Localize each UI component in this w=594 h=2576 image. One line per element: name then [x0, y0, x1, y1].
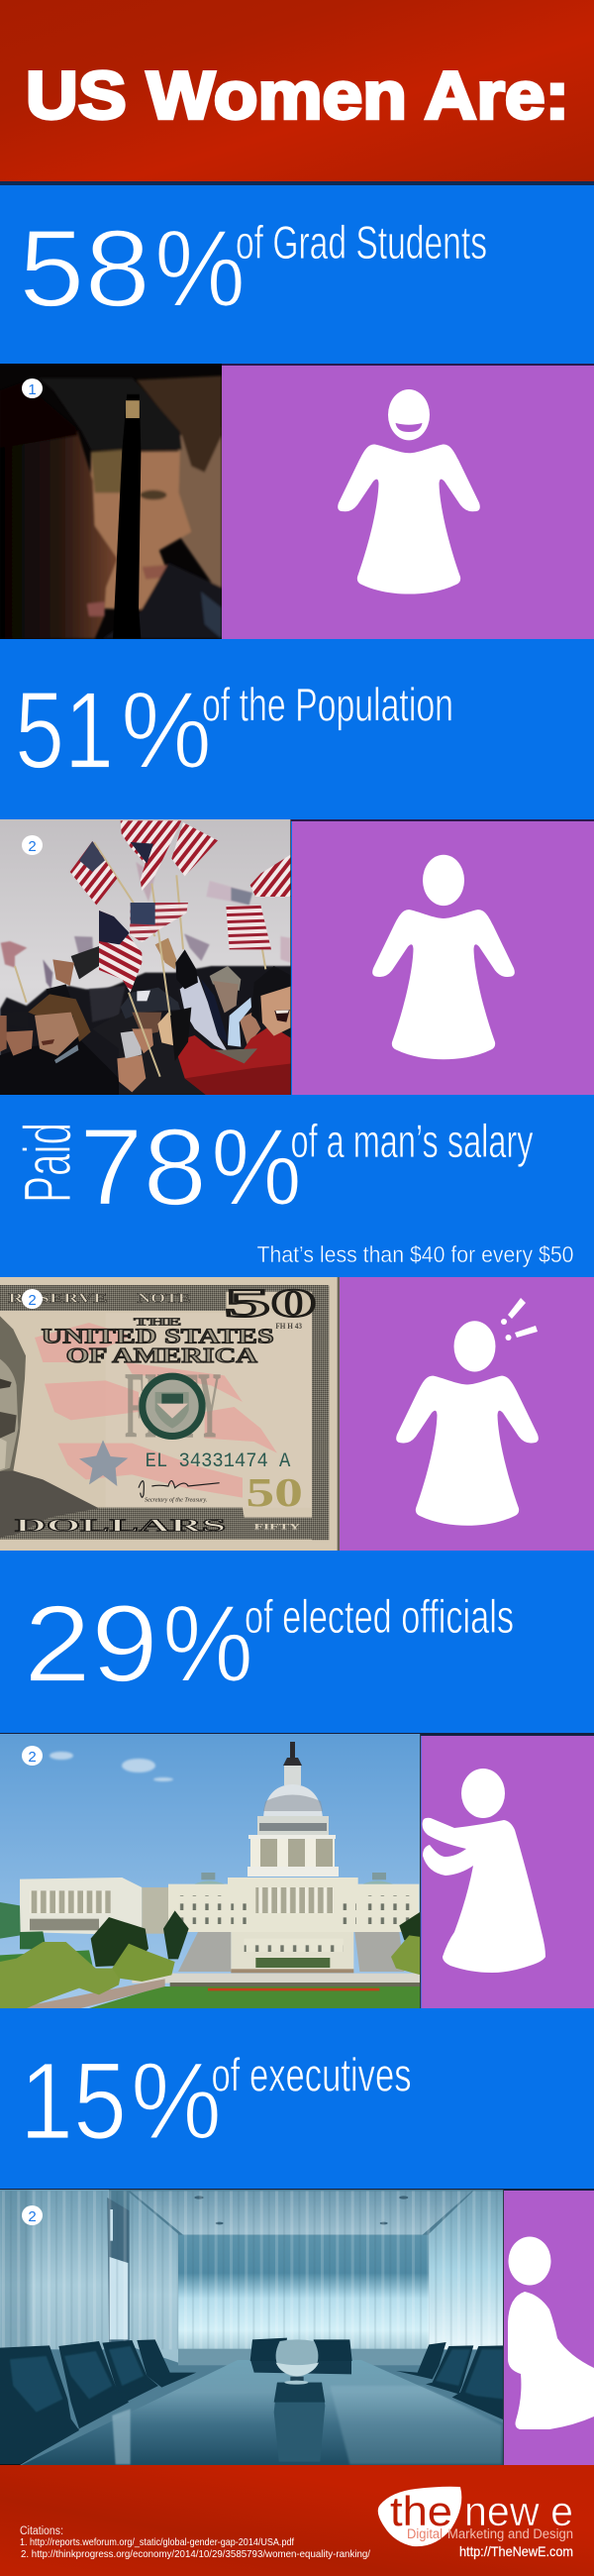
clouds	[50, 1752, 173, 1781]
stat: 51% of the population: %	[121, 670, 212, 792]
left wing	[20, 1878, 142, 1935]
right man	[251, 966, 276, 1020]
vase reflection	[274, 2383, 325, 2462]
center man with cap	[115, 1015, 119, 1017]
bill lettering: RESERVE	[8, 1290, 107, 1305]
signature	[139, 1481, 220, 1497]
logo: new e	[464, 2488, 573, 2534]
citation badge: 2	[28, 1292, 37, 1309]
chairs	[0, 2338, 505, 2464]
citation badge: 2	[28, 838, 37, 855]
crowd mass	[0, 966, 292, 1097]
bill lettering: 50	[246, 1470, 303, 1516]
stat: paid 78% of a man's salary	[10, 1107, 574, 1267]
table	[18, 2360, 505, 2467]
stat: 29% of elected officials	[24, 1583, 514, 1705]
man behind	[176, 434, 222, 590]
curtain folds	[0, 2191, 505, 2349]
logo: http://TheNewE.com	[459, 2543, 573, 2559]
citations: 1. http://reports.weforum.org/_static/global-gender-gap-2014/USA.pdf	[20, 2536, 294, 2548]
steps	[178, 1932, 231, 1972]
row 1 shadow line	[0, 364, 594, 366]
red jacket	[178, 1028, 291, 1095]
gloved hands	[157, 1013, 174, 1046]
second woman	[91, 451, 191, 610]
stat: 15% of executives: of executives	[212, 2049, 412, 2100]
gown	[102, 563, 222, 639]
seal	[143, 1376, 202, 1436]
citation badge	[22, 2205, 43, 2225]
stat: 51% of the population: 51	[15, 670, 114, 792]
citation badge	[22, 1289, 43, 1309]
icon: woman hit with ceiling marks	[396, 1321, 539, 1526]
stat: 29% of elected officials: %	[162, 1583, 253, 1705]
front woman	[0, 431, 118, 639]
icon: smiling woman	[338, 389, 480, 594]
right curtain	[429, 2191, 505, 2349]
logo: Marketing and Design	[447, 2526, 573, 2541]
pink swooshes	[35, 1323, 277, 1498]
logo: the	[390, 2488, 452, 2534]
citation badge: 2	[28, 2208, 37, 2225]
header banner	[0, 0, 594, 185]
citation badge	[22, 835, 43, 855]
star	[79, 1440, 128, 1486]
tassel	[113, 394, 141, 639]
stat: 58% of grad students: %	[154, 208, 246, 330]
citations	[20, 2525, 370, 2560]
cap	[38, 377, 182, 450]
central wing	[168, 1878, 419, 1932]
bill lettering: UNITED STATES	[42, 1325, 274, 1348]
note: That’s less than $40 for every $50	[257, 1241, 574, 1267]
inner left curtain	[130, 2193, 178, 2363]
stat: paid 78% of a man's salary: %	[211, 1107, 302, 1229]
ceiling lights	[194, 2196, 408, 2224]
panel: purple woman surprised	[340, 1277, 594, 1551]
photo: graduates	[0, 364, 222, 639]
icon: pushing woman	[423, 1769, 545, 1973]
stat: 58% of grad students	[19, 208, 487, 330]
stat: 58% of grad students: of Grad Students	[236, 216, 487, 268]
poles	[15, 842, 265, 1077]
stat: 15% of executives	[20, 2041, 412, 2162]
logo: Digital	[407, 2526, 443, 2541]
left curtain	[0, 2188, 109, 2349]
back curtain	[178, 2235, 429, 2362]
bill lettering: FIFTY	[125, 1352, 221, 1458]
vase	[276, 2339, 318, 2378]
panel: purple woman pushing wall	[422, 1736, 594, 2008]
icon: squeezed woman	[508, 2237, 594, 2429]
path	[0, 1979, 165, 2011]
camera and hand top	[71, 946, 99, 979]
chair highlights	[10, 2346, 503, 2413]
grey man behind	[210, 966, 241, 991]
ceiling	[131, 2191, 472, 2235]
bill lettering: NOTE	[137, 1290, 191, 1305]
citation badge	[22, 378, 43, 398]
citations: Citations:	[20, 2525, 63, 2537]
stat: 51% of the population	[15, 670, 453, 792]
row 5 shadow line	[0, 2189, 594, 2191]
stat: paid 78% of a man's salary: 78	[79, 1107, 207, 1229]
bill lettering: OF AMERICA	[66, 1343, 258, 1367]
logo	[378, 2487, 573, 2559]
photo: fifty dollar bill: Secretary of the Treasury.	[145, 1497, 208, 1504]
terrace	[132, 1974, 421, 1984]
window	[107, 2198, 130, 2343]
left man	[0, 1038, 119, 1097]
bill lettering: FH H 43	[275, 1321, 303, 1331]
stat: 58% of grad students: 58	[19, 208, 150, 330]
grass and trees	[0, 1950, 94, 1988]
row 4 shadow line	[0, 1733, 594, 1736]
photo: fifty dollar bill	[0, 1273, 340, 1556]
panel: purple woman smiling	[222, 366, 594, 639]
bill lettering: FIFTY	[254, 1522, 301, 1531]
sleeves	[201, 979, 230, 1045]
lawn	[79, 1986, 421, 2011]
flags	[70, 841, 117, 905]
photo: capitol building	[0, 1734, 421, 2011]
citation badge	[22, 1746, 43, 1766]
engraved border	[0, 1285, 226, 1311]
building lower part	[0, 1873, 421, 2011]
photo: boardroom	[0, 2188, 505, 2467]
citations: 2. http://thinkprogress.org/economy/2014/10/29/3585793/women-equality-ranking/	[21, 2548, 370, 2560]
title: US Women Are:	[26, 57, 569, 133]
panel: purple woman against edge	[504, 2191, 594, 2465]
back chair reflection	[250, 2361, 351, 2374]
stat: 29% of elected officials: 29	[24, 1583, 158, 1705]
citation badge: 2	[28, 1749, 37, 1766]
stat: paid 78% of a man's salary: Paid	[10, 1123, 85, 1203]
icon: neutral woman	[372, 855, 515, 1059]
glass reflections on table	[112, 2409, 131, 2464]
stat: 15% of executives: %	[131, 2041, 222, 2162]
bill lettering: THE	[134, 1318, 181, 1329]
bill lettering: DOLLARS	[15, 1516, 226, 1536]
icon: exclamation marks	[501, 1298, 538, 1341]
bill lettering: 50	[225, 1280, 317, 1325]
serial: EL 34331474 A	[146, 1450, 290, 1473]
row 2 shadow line	[0, 819, 594, 821]
distant flags	[1, 862, 290, 989]
stat: 51% of the population: of the Population	[202, 678, 453, 731]
photo: crowd with flags	[0, 817, 292, 1097]
stat: 15% of executives: 15	[20, 2041, 127, 2162]
portrait	[0, 1316, 99, 1538]
dome	[248, 1742, 339, 1877]
footer	[0, 2465, 594, 2576]
hood and woman	[240, 1013, 260, 1046]
panel: purple woman neutral	[292, 821, 594, 1095]
citation badge: 1	[28, 381, 37, 398]
curtain hem	[178, 2349, 433, 2365]
bill lettering	[8, 1280, 317, 1536]
